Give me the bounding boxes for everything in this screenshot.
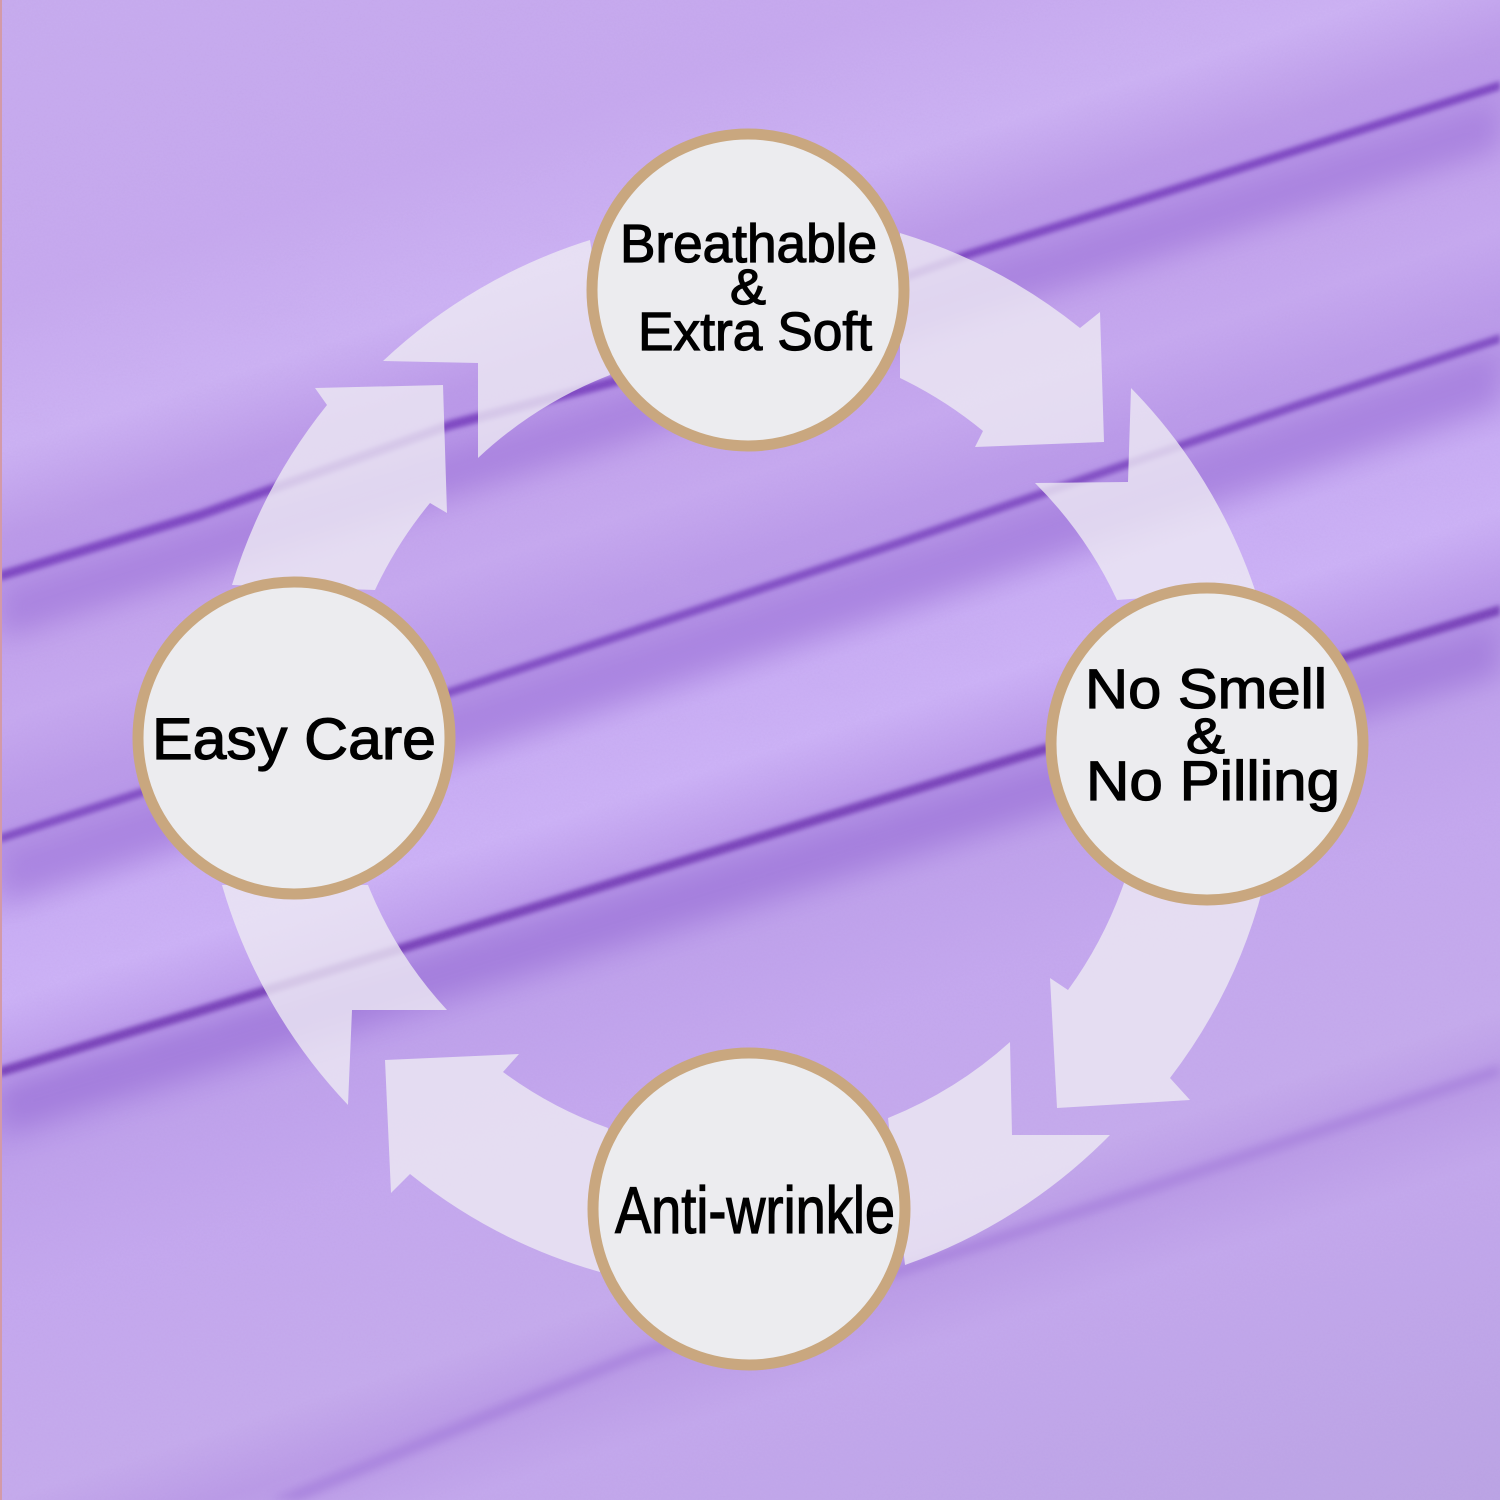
circle: no smell and no pilling (1051, 588, 1363, 900)
label: no smell: No Smell (1085, 657, 1327, 720)
label: breathable: Breathable (620, 214, 877, 274)
arrow: into breathable (383, 240, 610, 458)
circle: easy care (138, 582, 450, 894)
arrow: anti-wrinkle to easy care (385, 1054, 608, 1272)
label: anti-wrinkle: Anti-wrinkle (615, 1173, 895, 1247)
arrow: no smell to anti-wrinkle (1050, 880, 1265, 1108)
label: extra soft: Extra Soft (638, 302, 872, 362)
label: easy care: Easy Care (152, 707, 436, 772)
ring of arrows (222, 233, 1265, 1272)
label: ampersand: & (1186, 708, 1225, 764)
circle: breathable and extra soft (592, 134, 904, 446)
label: ampersand: & (730, 259, 766, 315)
arrow: into easy care (222, 885, 447, 1105)
label: no pilling: No Pilling (1086, 749, 1340, 812)
arrow: breathable to no smell (900, 233, 1104, 447)
arrow: into no smell (1035, 388, 1255, 600)
arrow: into anti-wrinkle (888, 1042, 1110, 1265)
arrow: easy care to breathable (232, 385, 447, 590)
circle: anti-wrinkle (593, 1053, 905, 1365)
